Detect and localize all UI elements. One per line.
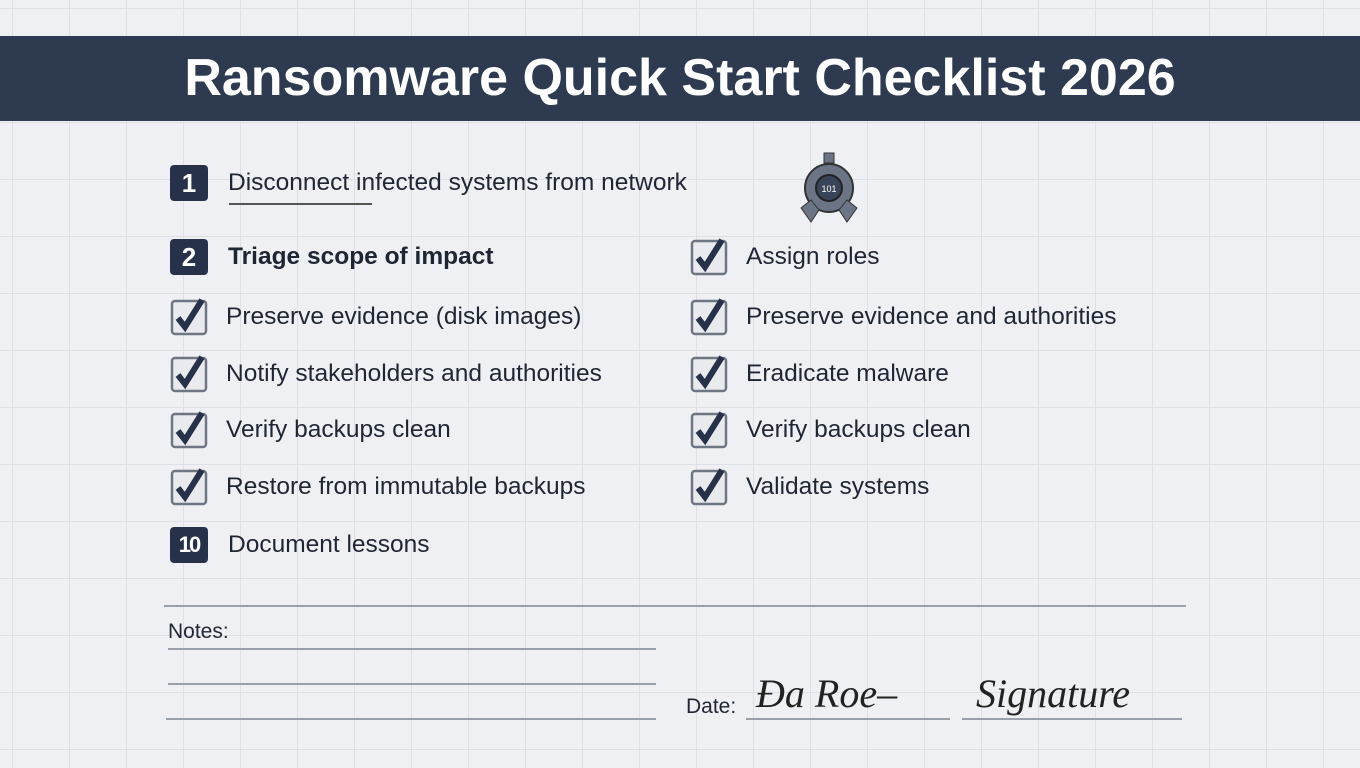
item: notify [170, 355, 602, 392]
item 10: 10 [179, 532, 199, 557]
item: preserve evidence: Preserve evidence (disk images) [226, 303, 581, 330]
item: preserve evidence and authorities [690, 298, 1116, 336]
item: preserve evidence and authorities: Preserve evidence and authorities [746, 303, 1116, 330]
item: notify: Notify stakeholders and authorities [226, 360, 602, 387]
item: verify [170, 411, 451, 448]
underline accent [229, 203, 372, 205]
item: preserve evidence [170, 298, 581, 336]
item 1: Disconnect infected systems from network [228, 169, 687, 196]
item: assign roles [690, 238, 879, 276]
item 10 [170, 527, 430, 563]
date label: Date: [686, 695, 736, 718]
date and signature: Ða Roe– [756, 671, 897, 716]
left column checked items [170, 298, 602, 506]
title: Ransomware Quick Start Checklist 2026 [184, 49, 1176, 107]
item: validate: Validate systems [746, 473, 929, 500]
signature: Signature [976, 671, 1130, 716]
item: restore: Restore from immutable backups [226, 473, 585, 500]
item: verify backups [690, 411, 971, 448]
title [0, 36, 1360, 121]
item: verify: Verify backups clean [226, 416, 451, 443]
item 2 [170, 239, 494, 275]
item 1: 1 [182, 168, 196, 198]
item: verify backups: Verify backups clean [746, 416, 971, 443]
item 1 [170, 165, 687, 201]
item: validate [690, 468, 929, 506]
item 2: Triage scope of impact [228, 243, 494, 270]
notes label: Notes: [168, 620, 229, 643]
right column checked items [690, 238, 1116, 506]
item: eradicate [690, 355, 949, 392]
item 2: 2 [182, 242, 196, 272]
item: restore [170, 468, 585, 506]
item 10: Document lessons [228, 531, 430, 558]
icon: gear lock: 101 [821, 184, 837, 194]
item: assign roles: Assign roles [746, 243, 879, 270]
icon: gear lock [800, 152, 858, 223]
item: eradicate: Eradicate malware [746, 360, 949, 387]
date and signature [686, 671, 1182, 720]
